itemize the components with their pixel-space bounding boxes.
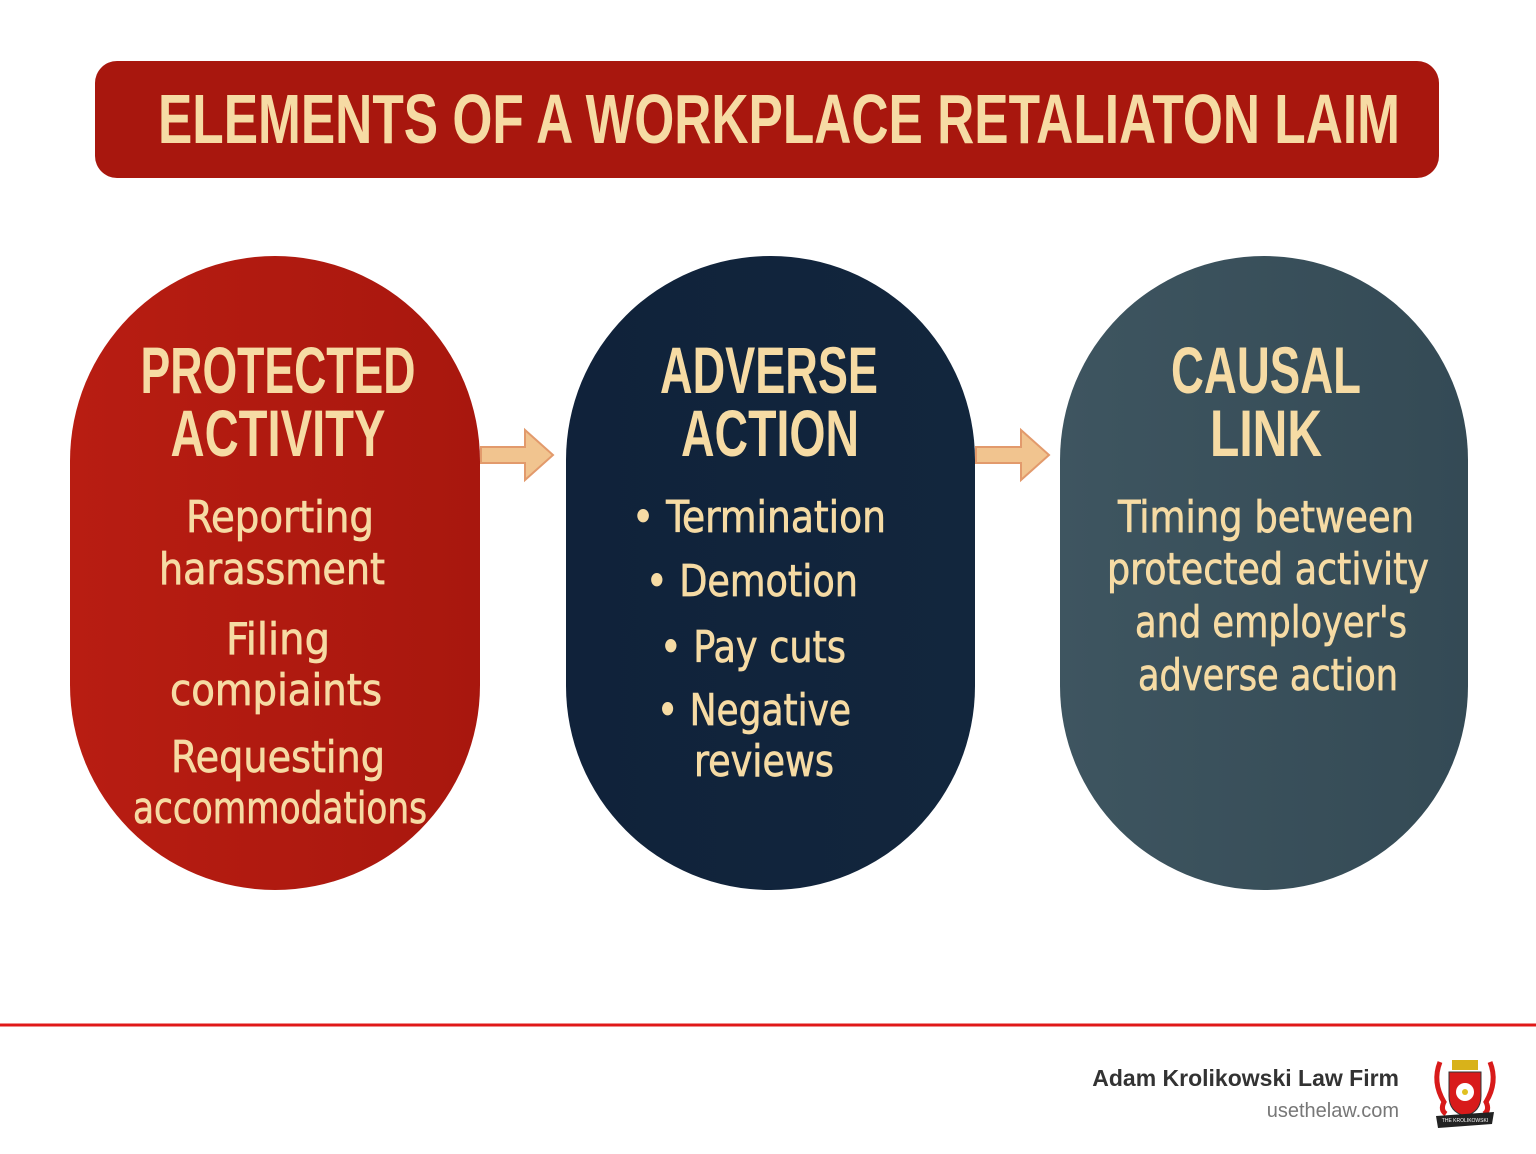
icon: firm crest	[1436, 1060, 1494, 1128]
list: protected activities: Filing	[226, 614, 330, 665]
list: adverse actions: • Termination	[632, 492, 886, 543]
divider	[0, 1024, 1536, 1026]
list: adverse actions	[632, 492, 886, 787]
title bar	[95, 61, 1439, 178]
heading: protected activity: ACTIVITY	[170, 396, 386, 470]
heading: adverse action: ACTION	[681, 396, 859, 470]
arrow 1	[481, 430, 553, 480]
panel: adverse action	[566, 256, 975, 890]
footer: firm name: usethelaw.com	[1267, 1100, 1399, 1122]
list: adverse actions: • Demotion	[646, 556, 858, 607]
panel: causal link	[1060, 256, 1468, 890]
list: protected activities: harassment	[159, 544, 385, 595]
list: protected activities: compiaints	[170, 665, 382, 716]
arrow 2	[976, 430, 1049, 480]
heading: causal link: LINK	[1210, 396, 1322, 470]
heading: adverse action: ADVERSE	[660, 333, 878, 407]
list: adverse actions: • Negative	[657, 685, 851, 736]
text: causal link description: Timing between	[1117, 492, 1414, 543]
list: protected activities: Requesting	[171, 732, 385, 783]
list: protected activities: accommodations	[133, 783, 427, 834]
list: adverse actions: reviews	[694, 736, 834, 787]
heading: protected activity: PROTECTED	[140, 333, 416, 407]
text: causal link description: and employer's	[1135, 597, 1407, 648]
footer: firm name	[1092, 1065, 1399, 1122]
heading: causal link	[1171, 333, 1361, 470]
panel: protected activity	[70, 256, 480, 890]
heading: adverse action	[660, 333, 878, 470]
list: adverse actions: • Pay cuts	[660, 622, 846, 673]
text: causal link description	[1107, 492, 1429, 701]
text: causal link description: protected activity	[1107, 544, 1429, 595]
text: causal link description: adverse action	[1138, 650, 1398, 701]
footer: firm name: Adam Krolikowski Law Firm	[1092, 1065, 1399, 1091]
list: protected activities	[133, 492, 427, 834]
heading: protected activity	[140, 333, 416, 470]
list: protected activities: Reporting	[186, 492, 374, 543]
heading: causal link: CAUSAL	[1171, 333, 1361, 407]
icon: firm crest: THE KROLIKOWSKI	[1442, 1118, 1488, 1124]
